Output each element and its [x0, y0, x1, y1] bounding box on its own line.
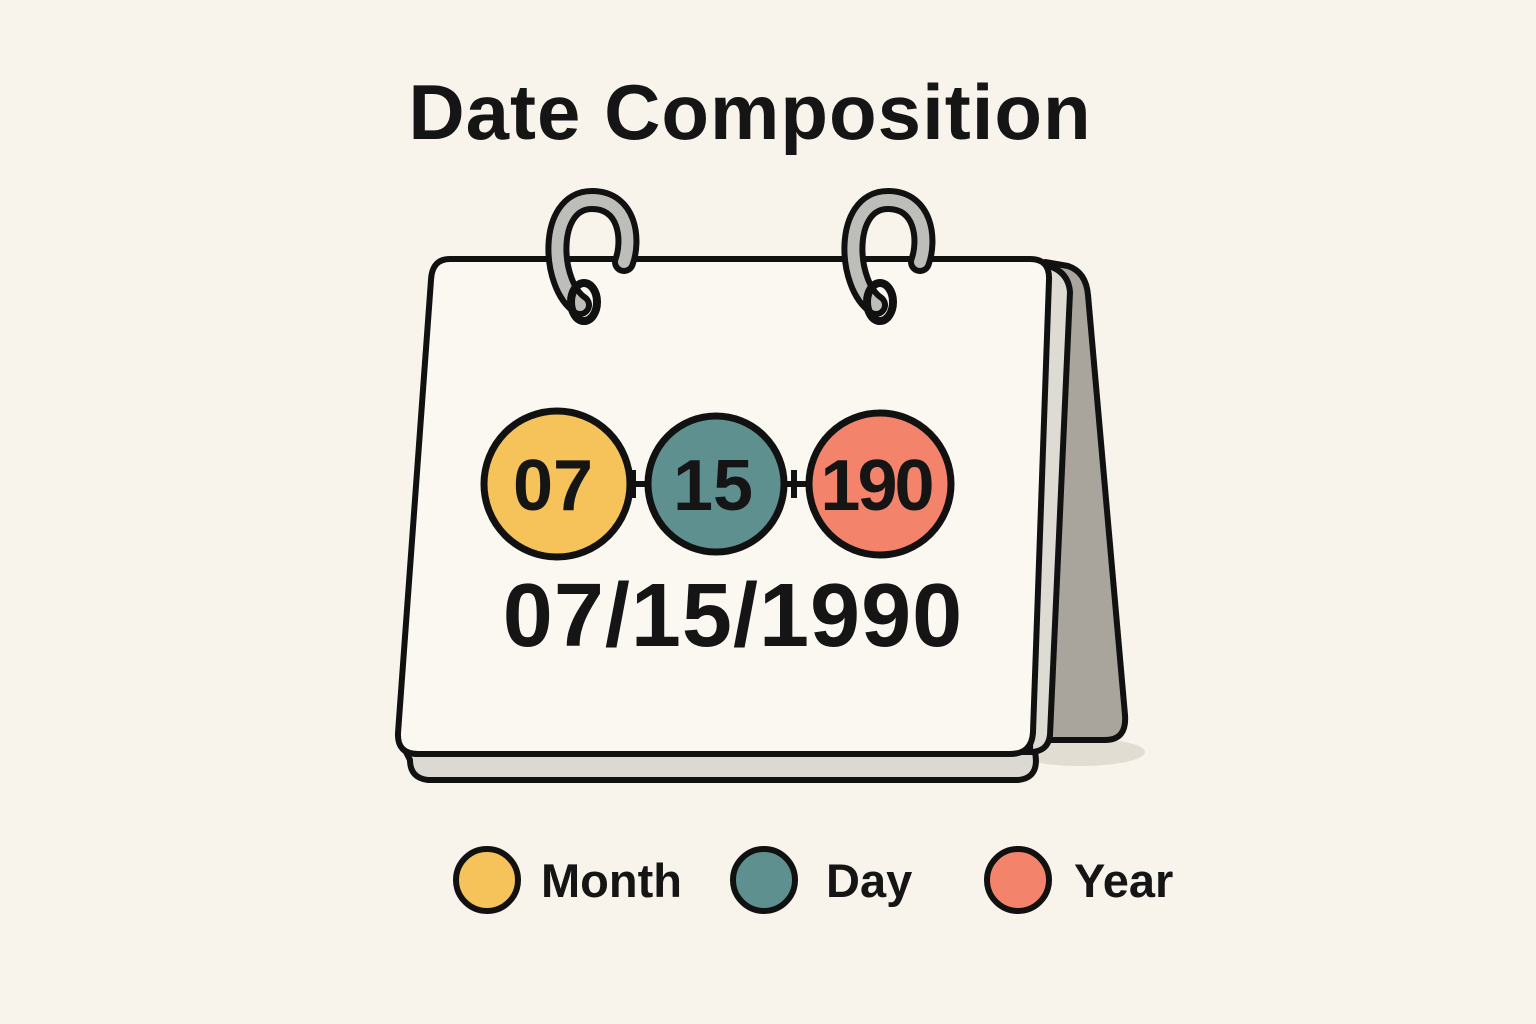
- legend: day: Day: [826, 854, 912, 907]
- circle: month 07: 07: [513, 446, 593, 526]
- legend: year: Year: [1074, 854, 1173, 907]
- title: Date Composition: [408, 68, 1092, 156]
- circle: day 15: [648, 416, 784, 552]
- legend: year: [987, 849, 1173, 911]
- circle: year 190: 190: [820, 446, 933, 526]
- shadow: [1015, 738, 1145, 766]
- legend: day: [733, 849, 912, 911]
- circle: year 190: [809, 413, 951, 555]
- connectors: [630, 470, 812, 498]
- circle: month 07: [484, 411, 630, 557]
- legend: month: Month: [541, 854, 682, 907]
- legend: [456, 849, 1173, 911]
- ring right: [853, 200, 923, 321]
- circle: day 15: 15: [673, 446, 753, 526]
- middle page edge: [1030, 264, 1070, 752]
- ring left: [557, 200, 627, 321]
- back stand: [1035, 262, 1125, 740]
- full date: 07/15/1990: [503, 566, 963, 666]
- bottom page layer: [405, 750, 1036, 780]
- calendar: [398, 200, 1145, 780]
- front page: [398, 259, 1049, 754]
- legend: month: [456, 849, 682, 911]
